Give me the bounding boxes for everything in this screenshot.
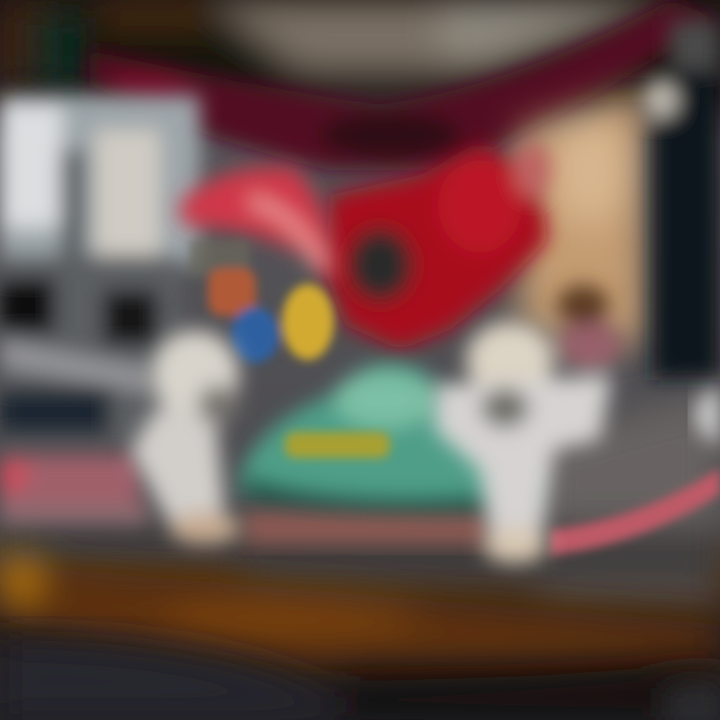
icon: white object at right edge xyxy=(695,385,720,445)
character: left white figure xyxy=(130,330,241,544)
icon: red cap xyxy=(178,167,335,285)
character: teal mound xyxy=(238,363,535,510)
background: ceiling xyxy=(0,0,720,90)
table edge: orange brown band xyxy=(0,554,720,665)
bottom: dark foreground xyxy=(0,640,720,720)
label shape: yellow logo on mound xyxy=(285,432,390,458)
icon: red flower xyxy=(325,142,550,350)
character: colored body xyxy=(190,240,334,363)
floor: grey surface xyxy=(0,390,720,600)
floor: pink band left xyxy=(0,455,150,525)
floor: pink band centre xyxy=(245,510,490,545)
background: dark red ceiling band xyxy=(90,0,720,170)
panel: left windows xyxy=(0,95,200,445)
panel: tan wall xyxy=(520,90,645,345)
panel: dark right wall xyxy=(642,20,720,380)
floor: pink arc right xyxy=(550,468,720,555)
character: right white figure xyxy=(435,285,622,563)
